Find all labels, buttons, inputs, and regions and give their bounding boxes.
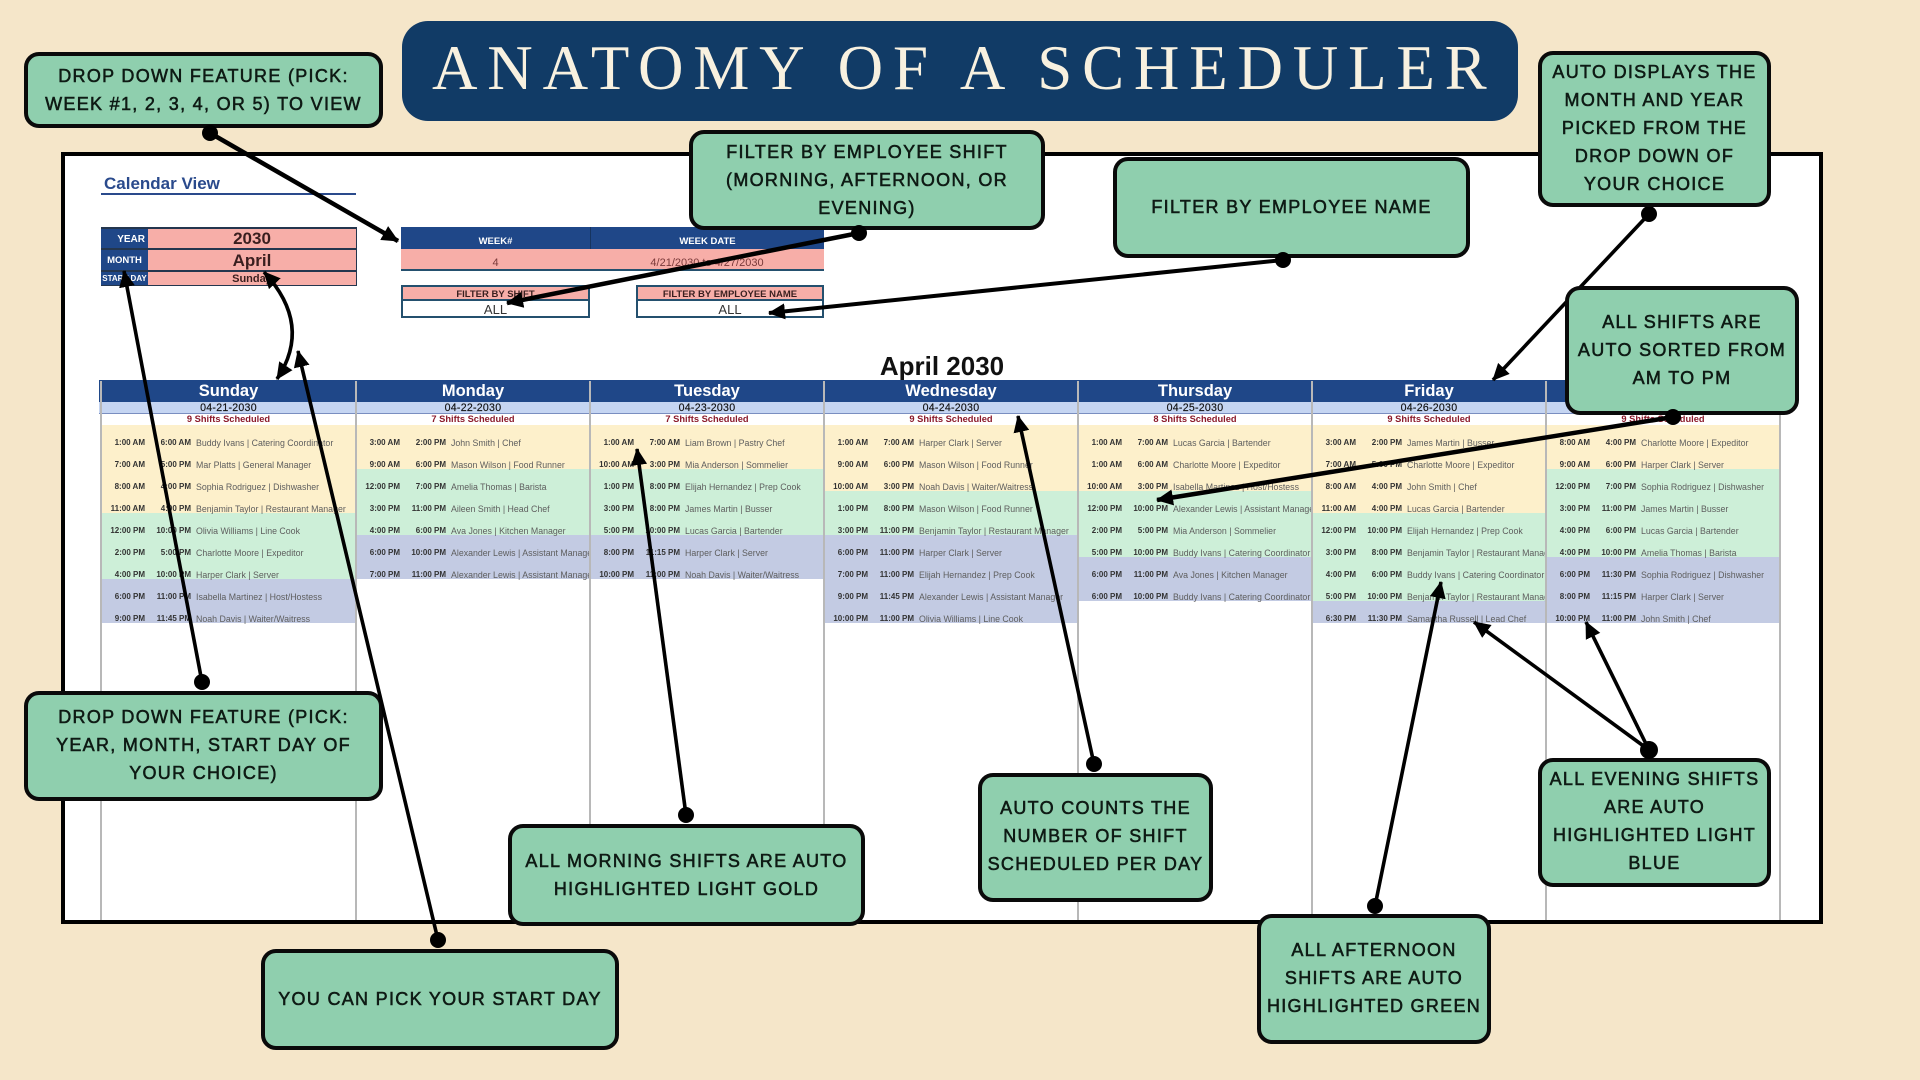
filter by shift (401, 285, 590, 318)
column: Tuesday: 11:15 PM (646, 548, 680, 557)
column: Saturday: 9 Shifts Scheduled (1621, 414, 1705, 424)
column: Tuesday: 3:00 PM (604, 504, 634, 513)
column: Wednesday: Olivia Williams | Line Cook (919, 614, 1023, 624)
filter by shift: FILTER BY SHIFT (456, 289, 535, 300)
column: Wednesday: Elijah Hernandez | Prep Cook (919, 570, 1035, 580)
month row (101, 250, 356, 270)
column: Saturday: 12:00 PM (1555, 482, 1590, 491)
column: Thursday: 11:00 PM (1134, 570, 1168, 579)
column: Friday: 3:00 AM (1326, 438, 1356, 447)
table: week number and week date: WEEK DATE (679, 236, 736, 247)
column: Friday: Elijah Hernandez | Prep Cook (1407, 526, 1523, 536)
table: week number and week date (401, 227, 824, 271)
callout: filter by employee shift (689, 130, 1045, 230)
column: Friday: 5:00 PM (1372, 460, 1402, 469)
column: Saturday: Saturday (1628, 382, 1698, 400)
year row: 2030 (233, 229, 271, 248)
column: Wednesday: 11:00 PM (880, 526, 914, 535)
callout: afternoon shifts green (1257, 914, 1491, 1044)
column: Saturday: 4:00 PM (1560, 548, 1590, 557)
callout: filter by employee name (1113, 157, 1470, 258)
callout: pick your start day: YOU CAN PICK YOUR START DAY (278, 989, 602, 1009)
column: Wednesday: Alexander Lewis | Assistant Manager (919, 592, 1063, 602)
column: Thursday: 04-25-2030 (1167, 402, 1223, 414)
column: Sunday: 4:00 PM (161, 504, 191, 513)
column: Friday: 8:00 PM (1372, 548, 1402, 557)
column: Monday: 11:00 PM (412, 570, 446, 579)
column: Friday: 7:00 AM (1326, 460, 1356, 469)
column: Saturday: 3:00 PM (1560, 504, 1590, 513)
column: Thursday: 10:00 AM (1087, 482, 1122, 491)
title banner (402, 21, 1518, 121)
column: Saturday: 11:15 PM (1602, 592, 1636, 601)
column: Thursday: Mia Anderson | Sommelier (1173, 526, 1276, 536)
column: Wednesday: Mason Wilson | Food Runner (919, 460, 1033, 470)
column: Wednesday: 7:00 AM (884, 438, 914, 447)
column: Friday: 3:00 PM (1326, 548, 1356, 557)
heading: calendar view: Calendar View (104, 174, 220, 193)
column: Sunday: 4:00 PM (161, 482, 191, 491)
column: Monday: 04-22-2030 (445, 402, 501, 414)
column: Saturday: 8:00 PM (1560, 592, 1590, 601)
column: Tuesday: 1:00 AM (604, 438, 634, 447)
column: Sunday: 7:00 AM (115, 460, 145, 469)
start day row: START DAY (102, 274, 147, 283)
column: Tuesday: Noah Davis | Waiter/Waitress (685, 570, 799, 580)
column: Friday: 4:00 PM (1372, 504, 1402, 513)
column: Monday: 10:00 PM (411, 548, 446, 557)
filter by employee name: FILTER BY EMPLOYEE NAME (663, 289, 797, 300)
column: Thursday (1078, 380, 1312, 602)
column: Wednesday: Noah Davis | Waiter/Waitress (919, 482, 1033, 492)
callout: drop down year month start day (24, 691, 383, 801)
column: Thursday: 10:00 PM (1133, 548, 1168, 557)
column: Sunday: 2:00 PM (115, 548, 145, 557)
callout: auto counts shifts: NUMBER OF SHIFT (1003, 826, 1188, 846)
column: Saturday: 11:00 PM (1602, 614, 1636, 623)
column: Tuesday: 1:00 PM (604, 482, 634, 491)
month row: MONTH (107, 255, 142, 266)
arrow: shift filter (507, 225, 867, 303)
column: Sunday: 11:00 PM (157, 592, 191, 601)
table: year month start day (101, 227, 357, 286)
column: Saturday: Lucas Garcia | Bartender (1641, 526, 1739, 536)
column: Friday: Charlotte Moore | Expeditor (1407, 460, 1514, 470)
column: Friday: Friday (1404, 382, 1454, 400)
callout: morning shifts gold: HIGHLIGHTED LIGHT GOLD (554, 879, 819, 899)
callout: afternoon shifts green: HIGHLIGHTED GREEN (1267, 996, 1481, 1016)
column: Thursday: 3:00 PM (1138, 482, 1168, 491)
table: week number and week date: 4/21/2030 to 4/27/2030 (650, 257, 764, 269)
column: Sunday: Charlotte Moore | Expeditor (196, 548, 303, 558)
column: Tuesday: 8:00 PM (650, 504, 680, 513)
column: Friday (1312, 380, 1546, 624)
column: Saturday (1546, 380, 1779, 624)
column: Tuesday: 3:00 PM (650, 460, 680, 469)
column: Friday: 2:00 PM (1372, 438, 1402, 447)
column: Tuesday: Tuesday (674, 382, 740, 400)
callout: afternoon shifts green: ALL AFTERNOON (1291, 940, 1457, 960)
column: Friday: 10:00 PM (1367, 592, 1402, 601)
column: Wednesday: Harper Clark | Server (919, 438, 1002, 448)
column: Saturday: 11:00 PM (1602, 504, 1636, 513)
column: Friday: 04-26-2030 (1401, 402, 1457, 414)
column: Wednesday: 9 Shifts Scheduled (909, 414, 993, 424)
column: Sunday: Olivia Williams | Line Cook (196, 526, 300, 536)
column: Thursday: 7:00 AM (1138, 438, 1168, 447)
column: Wednesday: 1:00 PM (838, 504, 868, 513)
year row (101, 229, 356, 248)
column: Sunday: Noah Davis | Waiter/Waitress (196, 614, 310, 624)
column: Monday: Monday (442, 382, 504, 400)
title banner: ANATOMY OF A SCHEDULER (432, 33, 1496, 103)
column: Tuesday: 5:00 PM (604, 526, 634, 535)
column: Sunday: 1:00 AM (115, 438, 145, 447)
column: Wednesday: 10:00 PM (833, 614, 868, 623)
column: Monday: 7:00 PM (416, 482, 446, 491)
column: Friday: 8:00 AM (1326, 482, 1356, 491)
arrow: employee name filter (769, 252, 1291, 313)
callout: evening shifts light blue: ARE AUTO (1604, 797, 1705, 817)
callout: all shifts auto sorted: ALL SHIFTS ARE (1602, 312, 1762, 332)
callout: auto counts shifts (978, 773, 1213, 902)
column: Saturday: 4:00 PM (1560, 526, 1590, 535)
column: Saturday: 6:00 PM (1606, 526, 1636, 535)
column: Tuesday: Elijah Hernandez | Prep Cook (685, 482, 801, 492)
column: Tuesday: 04-23-2030 (679, 402, 735, 414)
column: Friday: Lucas Garcia | Bartender (1407, 504, 1505, 514)
callout: evening shifts light blue: ALL EVENING SHIFTS (1550, 769, 1759, 789)
column: Thursday: Thursday (1158, 382, 1232, 400)
column: Monday: 7:00 PM (370, 570, 400, 579)
column: Monday: John Smith | Chef (451, 438, 521, 448)
column: Monday (356, 380, 590, 580)
column: Thursday: 10:00 PM (1133, 504, 1168, 513)
column: Friday: 10:00 PM (1367, 526, 1402, 535)
column: Friday: 9 Shifts Scheduled (1387, 414, 1471, 424)
heading: calendar view (101, 172, 356, 195)
start day row: Sunday (232, 273, 272, 285)
column: Thursday: 8 Shifts Scheduled (1153, 414, 1237, 424)
column: Thursday: 5:00 PM (1092, 548, 1122, 557)
column: Saturday: 10:00 PM (1555, 614, 1590, 623)
column: Wednesday: 9:00 AM (838, 460, 868, 469)
column: Saturday: 6:00 PM (1560, 570, 1590, 579)
column: Sunday: 10:00 PM (156, 526, 191, 535)
callout: drop down year month start day: YEAR, MONTH, START DAY OF (56, 735, 351, 755)
column: Monday: 11:00 PM (412, 504, 446, 513)
column: Sunday: 8:00 AM (115, 482, 145, 491)
column: Monday: Mason Wilson | Food Runner (451, 460, 565, 470)
arrow: sorted shifts (1157, 409, 1681, 500)
callout: auto counts shifts: SCHEDULED PER DAY (988, 854, 1203, 874)
column: Monday: 3:00 PM (370, 504, 400, 513)
column: Friday: 11:00 AM (1322, 504, 1356, 513)
arrow: evening shifts to Friday (1474, 622, 1658, 759)
callout: evening shifts light blue: HIGHLIGHTED LIGHT (1553, 825, 1756, 845)
column: Thursday: 5:00 PM (1138, 526, 1168, 535)
column: Wednesday: 1:00 AM (838, 438, 868, 447)
column: Monday: 6:00 PM (416, 460, 446, 469)
column: Sunday: 10:00 PM (156, 570, 191, 579)
arrow: morning shifts (637, 449, 694, 823)
column: Sunday (102, 380, 356, 624)
column: Friday: 4:00 PM (1372, 482, 1402, 491)
callout: morning shifts gold (508, 824, 865, 926)
column: Saturday: 7:00 PM (1606, 482, 1636, 491)
column: Sunday: Mar Platts | General Manager (196, 460, 311, 470)
year row: YEAR (117, 234, 145, 245)
column: Tuesday: 11:00 PM (646, 570, 680, 579)
callout: drop down week: DROP DOWN FEATURE (PICK: (58, 66, 349, 86)
column: Saturday: Sophia Rodriguez | Dishwasher (1641, 482, 1764, 492)
callout: drop down week (24, 52, 383, 128)
callout: auto counts shifts: AUTO COUNTS THE (1000, 798, 1191, 818)
column: Wednesday: 11:45 PM (880, 592, 914, 601)
column: Wednesday: Wednesday (905, 382, 997, 400)
column: Saturday: James Martin | Busser (1641, 504, 1728, 514)
column: Wednesday: 11:00 PM (880, 614, 914, 623)
column: Saturday: Amelia Thomas | Barista (1641, 548, 1737, 558)
column: Thursday: 6:00 PM (1092, 592, 1122, 601)
arrow: afternoon shifts (1367, 582, 1441, 914)
column: Saturday: Sophia Rodriguez | Dishwasher (1641, 570, 1764, 580)
column: Friday: Buddy Ivans | Catering Coordinator (1407, 570, 1544, 580)
column: Tuesday: 7 Shifts Scheduled (665, 414, 749, 424)
column: Tuesday: 8:00 PM (650, 482, 680, 491)
arrow: drop down week to week table (202, 125, 398, 241)
column: Friday: 6:30 PM (1326, 614, 1356, 623)
column: Tuesday (590, 380, 824, 580)
column: Friday: James Martin | Busser (1407, 438, 1494, 448)
column: Saturday: 10:00 PM (1601, 548, 1636, 557)
column: Saturday: Charlotte Moore | Expeditor (1641, 438, 1748, 448)
column: Sunday: Buddy Ivans | Catering Coordinator (196, 438, 333, 448)
column: Thursday: 2:00 PM (1092, 526, 1122, 535)
filter by employee name: ALL (718, 302, 742, 317)
column: Saturday: 6:00 PM (1606, 460, 1636, 469)
column: Sunday: 6:00 AM (161, 438, 191, 447)
column: Friday: John Smith | Chef (1407, 482, 1477, 492)
callout: auto displays month and year (1538, 51, 1771, 207)
column: Tuesday: Lucas Garcia | Bartender (685, 526, 783, 536)
column: Friday: 11:30 PM (1368, 614, 1402, 623)
arrow: curved start day link (264, 272, 292, 379)
column: Thursday: 10:00 PM (1133, 592, 1168, 601)
column: Thursday: 6:00 AM (1138, 460, 1168, 469)
column: Monday: 6:00 PM (416, 526, 446, 535)
column: Wednesday (824, 380, 1078, 624)
column: Sunday: 11:00 AM (111, 504, 145, 513)
column: Wednesday: Mason Wilson | Food Runner (919, 504, 1033, 514)
callout: drop down year month start day: DROP DOWN FEATURE (PICK: (58, 707, 349, 727)
callout: all shifts auto sorted: AM TO PM (1633, 368, 1731, 388)
column: Wednesday: Harper Clark | Server (919, 548, 1002, 558)
callout: drop down week: WEEK #1, 2, 3, 4, OR 5) TO VIEW (45, 94, 362, 114)
month row: April (233, 251, 271, 270)
column: Wednesday: Benjamin Taylor | Restaurant Manager (919, 526, 1069, 536)
column: Monday: Ava Jones | Kitchen Manager (451, 526, 566, 536)
column: Wednesday: 8:00 PM (884, 504, 914, 513)
callout: evening shifts light blue (1538, 758, 1771, 887)
column: Wednesday: 9:00 PM (838, 592, 868, 601)
column: Saturday: 9:00 AM (1560, 460, 1590, 469)
column: Monday: 12:00 PM (365, 482, 400, 491)
column: Sunday: Harper Clark | Server (196, 570, 279, 580)
column: Thursday: Ava Jones | Kitchen Manager (1173, 570, 1288, 580)
arrow: evening shifts to Saturday (1586, 622, 1649, 750)
callout: all shifts auto sorted: AUTO SORTED FROM (1578, 340, 1786, 360)
column: Wednesday: 6:00 PM (838, 548, 868, 557)
panel: calendar frame (61, 152, 1823, 924)
table: week number and week date: WEEK# (479, 236, 512, 247)
column: Wednesday: 10:00 AM (833, 482, 868, 491)
callout: filter by employee name: FILTER BY EMPLOYEE NAME (1151, 197, 1432, 217)
column: Thursday: Charlotte Moore | Expeditor (1173, 460, 1280, 470)
callout: afternoon shifts green: SHIFTS ARE AUTO (1285, 968, 1463, 988)
column: Monday: 2:00 PM (416, 438, 446, 447)
column: Thursday: 1:00 AM (1092, 438, 1122, 447)
column: Sunday: 6:00 PM (115, 592, 145, 601)
column: Saturday: 04-27-2030 (1635, 402, 1691, 414)
column: Friday: Samantha Russell | Lead Chef (1407, 614, 1526, 624)
column: Thursday: 1:00 AM (1092, 460, 1122, 469)
column: Sunday: 5:00 PM (161, 460, 191, 469)
column: Sunday: Sunday (199, 382, 258, 400)
column: Friday: 4:00 PM (1326, 570, 1356, 579)
column: Wednesday: 7:00 PM (838, 570, 868, 579)
column: Sunday: 5:00 PM (161, 548, 191, 557)
callout: morning shifts gold: ALL MORNING SHIFTS ARE AUTO (525, 851, 848, 871)
column: Monday: Aileen Smith | Head Chef (451, 504, 550, 514)
column: Saturday: Harper Clark | Server (1641, 460, 1724, 470)
column: Wednesday: 11:00 PM (880, 548, 914, 557)
column: Sunday: 4:00 PM (115, 570, 145, 579)
heading: month and year: April 2030 (880, 351, 1004, 381)
column: Tuesday: Liam Brown | Pastry Chef (685, 438, 785, 448)
column: Saturday: Harper Clark | Server (1641, 592, 1724, 602)
column: Sunday: Isabella Martinez | Host/Hostess (196, 592, 322, 602)
column: Sunday: 04-21-2030 (200, 402, 257, 414)
callout: all shifts auto sorted (1565, 286, 1799, 415)
column: Tuesday: Harper Clark | Server (685, 548, 768, 558)
callout: drop down year month start day: YOUR CHOICE) (129, 763, 278, 783)
column: Thursday: Lucas Garcia | Bartender (1173, 438, 1271, 448)
column: Thursday: Buddy Ivans | Catering Coordinator (1173, 548, 1310, 558)
column: Sunday: 9 Shifts Scheduled (187, 414, 270, 424)
callout: evening shifts light blue: BLUE (1628, 853, 1681, 873)
callout: filter by employee shift: (MORNING, AFTERNOON, OR (726, 170, 1008, 190)
column: Tuesday: Mia Anderson | Sommelier (685, 460, 788, 470)
column: Saturday: 4:00 PM (1606, 438, 1636, 447)
callout: auto displays month and year: MONTH AND YEAR (1565, 90, 1744, 110)
callout: filter by employee shift: EVENING) (818, 198, 916, 218)
column: Wednesday: 3:00 PM (884, 482, 914, 491)
column: Wednesday: 11:00 PM (880, 570, 914, 579)
callout: pick your start day (261, 949, 619, 1050)
arrow: start day pointer (298, 351, 446, 948)
column: Saturday: John Smith | Chef (1641, 614, 1711, 624)
column: Friday: 5:00 PM (1326, 592, 1356, 601)
column: Tuesday: 8:00 PM (604, 548, 634, 557)
column: Saturday: 8:00 AM (1560, 438, 1590, 447)
filter by employee name (636, 285, 824, 318)
column: Monday: 3:00 AM (370, 438, 400, 447)
column: Tuesday: 10:00 AM (599, 460, 634, 469)
start day row (101, 272, 356, 285)
callout: auto displays month and year: DROP DOWN OF (1575, 146, 1734, 166)
arrow: shift count (1018, 416, 1102, 772)
column: Wednesday: 04-24-2030 (923, 402, 979, 414)
column: Sunday: 11:45 PM (157, 614, 191, 623)
column: Sunday: Sophia Rodriguez | Dishwasher (196, 482, 319, 492)
column: Tuesday: 10:00 PM (599, 570, 634, 579)
filter by shift: ALL (484, 302, 507, 317)
column: Tuesday: 10:00 PM (645, 526, 680, 535)
arrow: drop down year month (124, 271, 210, 690)
column: Friday: 6:00 PM (1372, 570, 1402, 579)
callout: filter by employee shift: FILTER BY EMPLOYEE SHIFT (726, 142, 1008, 162)
callout: auto displays month and year: PICKED FROM THE (1562, 118, 1747, 138)
column: Wednesday: 3:00 PM (838, 526, 868, 535)
column: Sunday: Benjamin Taylor | Restaurant Manager (196, 504, 346, 514)
callout: auto displays month and year: AUTO DISPLAYS THE (1552, 62, 1757, 82)
column: Sunday: 9:00 PM (115, 614, 145, 623)
column: Monday: 7 Shifts Scheduled (431, 414, 515, 424)
callout: auto displays month and year: YOUR CHOICE (1584, 174, 1725, 194)
column: Monday: 4:00 PM (370, 526, 400, 535)
column: Wednesday: 6:00 PM (884, 460, 914, 469)
column: Sunday: 12:00 PM (110, 526, 145, 535)
column: Thursday: 6:00 PM (1092, 570, 1122, 579)
column: Tuesday: 7:00 AM (650, 438, 680, 447)
column: Friday: 12:00 PM (1321, 526, 1356, 535)
table: week number and week date: 4 (492, 257, 499, 269)
column: Thursday: 12:00 PM (1087, 504, 1122, 513)
column: Thursday: Buddy Ivans | Catering Coordinator (1173, 592, 1310, 602)
column: Monday: Amelia Thomas | Barista (451, 482, 547, 492)
column: Monday: 9:00 AM (370, 460, 400, 469)
column: Thursday: Isabella Martinez | Host/Hostess (1173, 482, 1299, 492)
column: Tuesday: James Martin | Busser (685, 504, 772, 514)
column: Saturday: 11:30 PM (1602, 570, 1636, 579)
column: Monday: 6:00 PM (370, 548, 400, 557)
